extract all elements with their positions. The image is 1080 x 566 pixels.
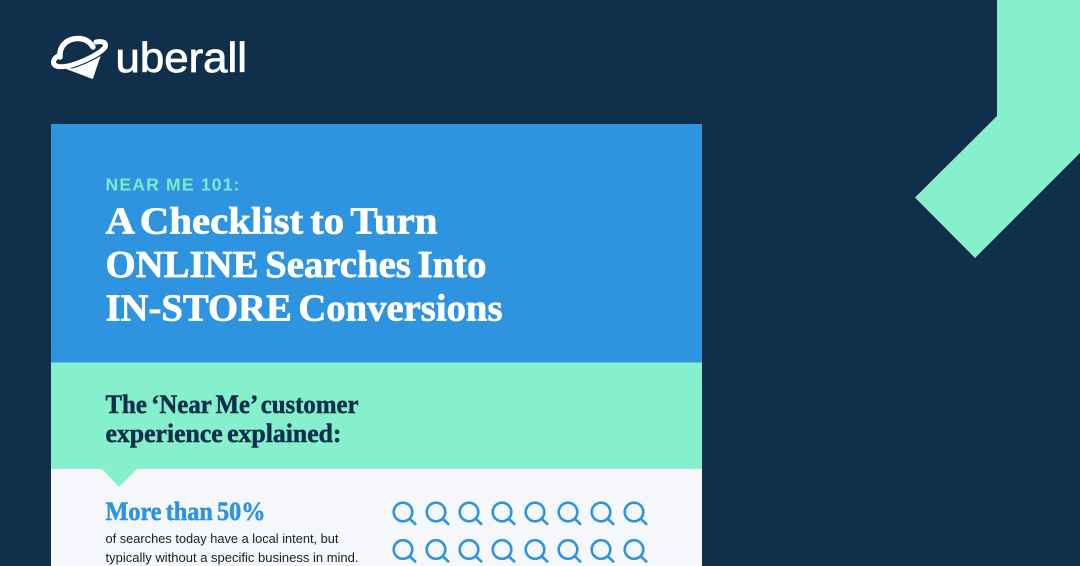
- title: IN-STORE Conversions: [106, 288, 503, 330]
- icon: planet pin: [54, 38, 108, 78]
- panel: title header: [51, 124, 702, 362]
- section heading: The ‘Near Me’ customer: [106, 390, 358, 419]
- title: A Checklist to Turn: [106, 200, 438, 242]
- panel: statistic: [51, 469, 702, 566]
- section heading: [106, 390, 358, 448]
- title: [106, 200, 503, 330]
- eyebrow: NEAR ME 101:: [106, 174, 240, 194]
- wordmark: uberall: [116, 34, 247, 81]
- stat description: [106, 531, 358, 565]
- stat headline: More than 50%: [106, 497, 266, 526]
- stat description: of searches today have a local intent, but: [106, 531, 339, 546]
- panel: section heading band: [51, 362, 702, 469]
- title: ONLINE Searches Into: [106, 244, 486, 286]
- decorative mint chevron: [915, 0, 1080, 258]
- stat description: typically without a specific business in mind.: [106, 550, 358, 565]
- pointer: [102, 469, 137, 487]
- section heading: experience explained:: [106, 419, 342, 448]
- icon grid: magnifying glasses: [394, 503, 646, 562]
- logo: uberall: [54, 34, 247, 81]
